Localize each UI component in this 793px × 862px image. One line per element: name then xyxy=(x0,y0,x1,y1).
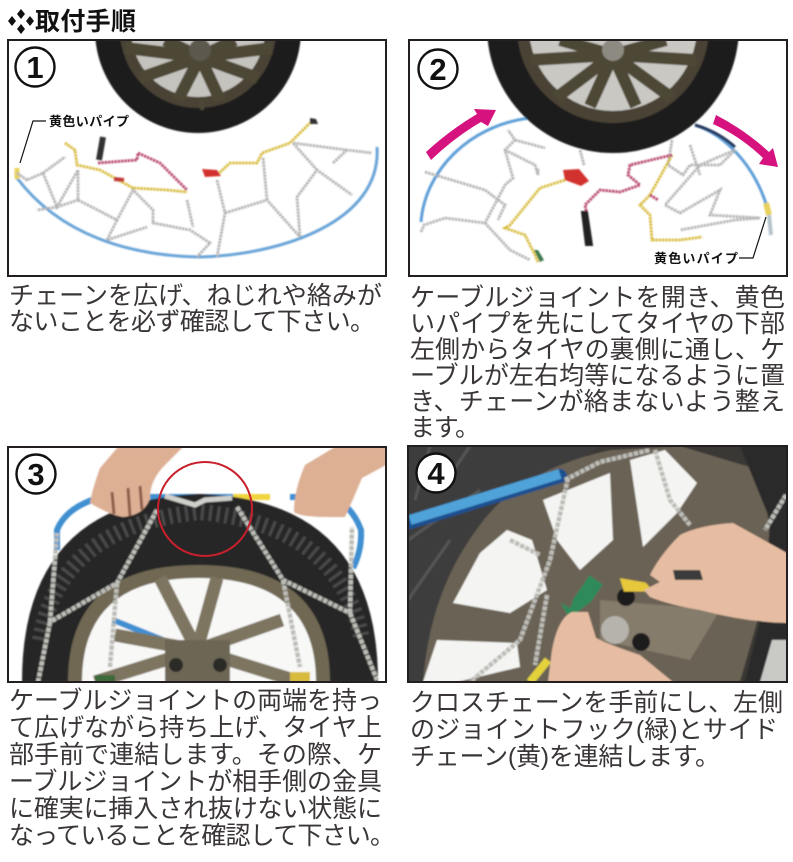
arrow: magenta up-right xyxy=(426,109,496,160)
number badge 3: 3 xyxy=(27,457,45,492)
panel: step 4 xyxy=(408,446,787,682)
text block: step 3 caption: て広げながら持ち上げ、タイヤ上 xyxy=(9,714,382,742)
text block: step 4 caption: チェーン(黄)を連結します。 xyxy=(410,743,720,771)
panel: step 3 xyxy=(8,447,386,682)
number badge 4: 4 xyxy=(427,456,445,491)
text block: step 4 caption: クロスチェーンを手前にし、左側 xyxy=(410,689,783,717)
text block: step 3 caption: ーブルジョイントが相手側の金具 xyxy=(9,768,382,796)
text block: step 1 caption: チェーンを広げ、ねじれや絡みが xyxy=(9,282,382,310)
text block: step 2 caption: ます。 xyxy=(410,414,480,442)
text block: step 4 caption: のジョイントフック(緑)とサイド xyxy=(410,716,778,744)
photo: lifting cable over tire xyxy=(8,447,386,682)
callout: yellow pipe: 黄色いパイプ xyxy=(49,114,129,129)
text block: step 3 caption: に確実に挿入され抜けない状態に xyxy=(9,795,382,823)
text block: step 2 caption: ーブルが左右均等になるように置 xyxy=(410,362,785,390)
number badge 1: 1 xyxy=(26,50,44,85)
callout: yellow pipe xyxy=(20,114,129,163)
title: installation steps: 取付手順 xyxy=(35,8,136,36)
text block: step 1 caption: ないことを必ず確認して下さい。 xyxy=(9,308,375,336)
number badge 3 xyxy=(16,454,56,494)
panel: step 2 xyxy=(408,39,788,277)
number badge 2 xyxy=(418,50,458,88)
photo: hands joining hook xyxy=(408,446,787,682)
text block: step 3 caption: ケーブルジョイントの両端を持っ xyxy=(9,687,382,715)
number badge 1 xyxy=(16,48,54,86)
callout: yellow pipe xyxy=(654,217,766,266)
callout: yellow pipe: 黄色いパイプ xyxy=(654,251,738,266)
photo: wheel and laid-out chain xyxy=(14,41,380,260)
photo: wheel over chain xyxy=(418,41,774,264)
text block: step 2 caption: ケーブルジョイントを開き、黄色 xyxy=(410,284,785,312)
highlight circle: red xyxy=(158,462,252,556)
arrow: magenta down-right xyxy=(713,115,778,167)
text block: step 3 caption: 部手前で連結します。その際、ケ xyxy=(9,741,382,769)
text block: step 1 caption xyxy=(9,282,382,336)
text block: step 2 caption: 左側からタイヤの裏側に通し、ケ xyxy=(410,336,785,364)
number badge 2: 2 xyxy=(429,52,447,87)
text block: step 3 caption xyxy=(9,687,395,850)
text block: step 4 caption xyxy=(410,689,783,771)
panel: step 1 xyxy=(7,39,387,277)
text block: step 2 caption: いパイプを先にしてタイヤの下部 xyxy=(410,310,785,338)
number badge 4 xyxy=(416,454,456,492)
text block: step 3 caption: なっていることを確認して下さい。 xyxy=(9,822,395,850)
text block: step 2 caption: き、チェーンが絡まないよう整え xyxy=(410,388,785,416)
text block: step 2 caption xyxy=(410,284,785,442)
